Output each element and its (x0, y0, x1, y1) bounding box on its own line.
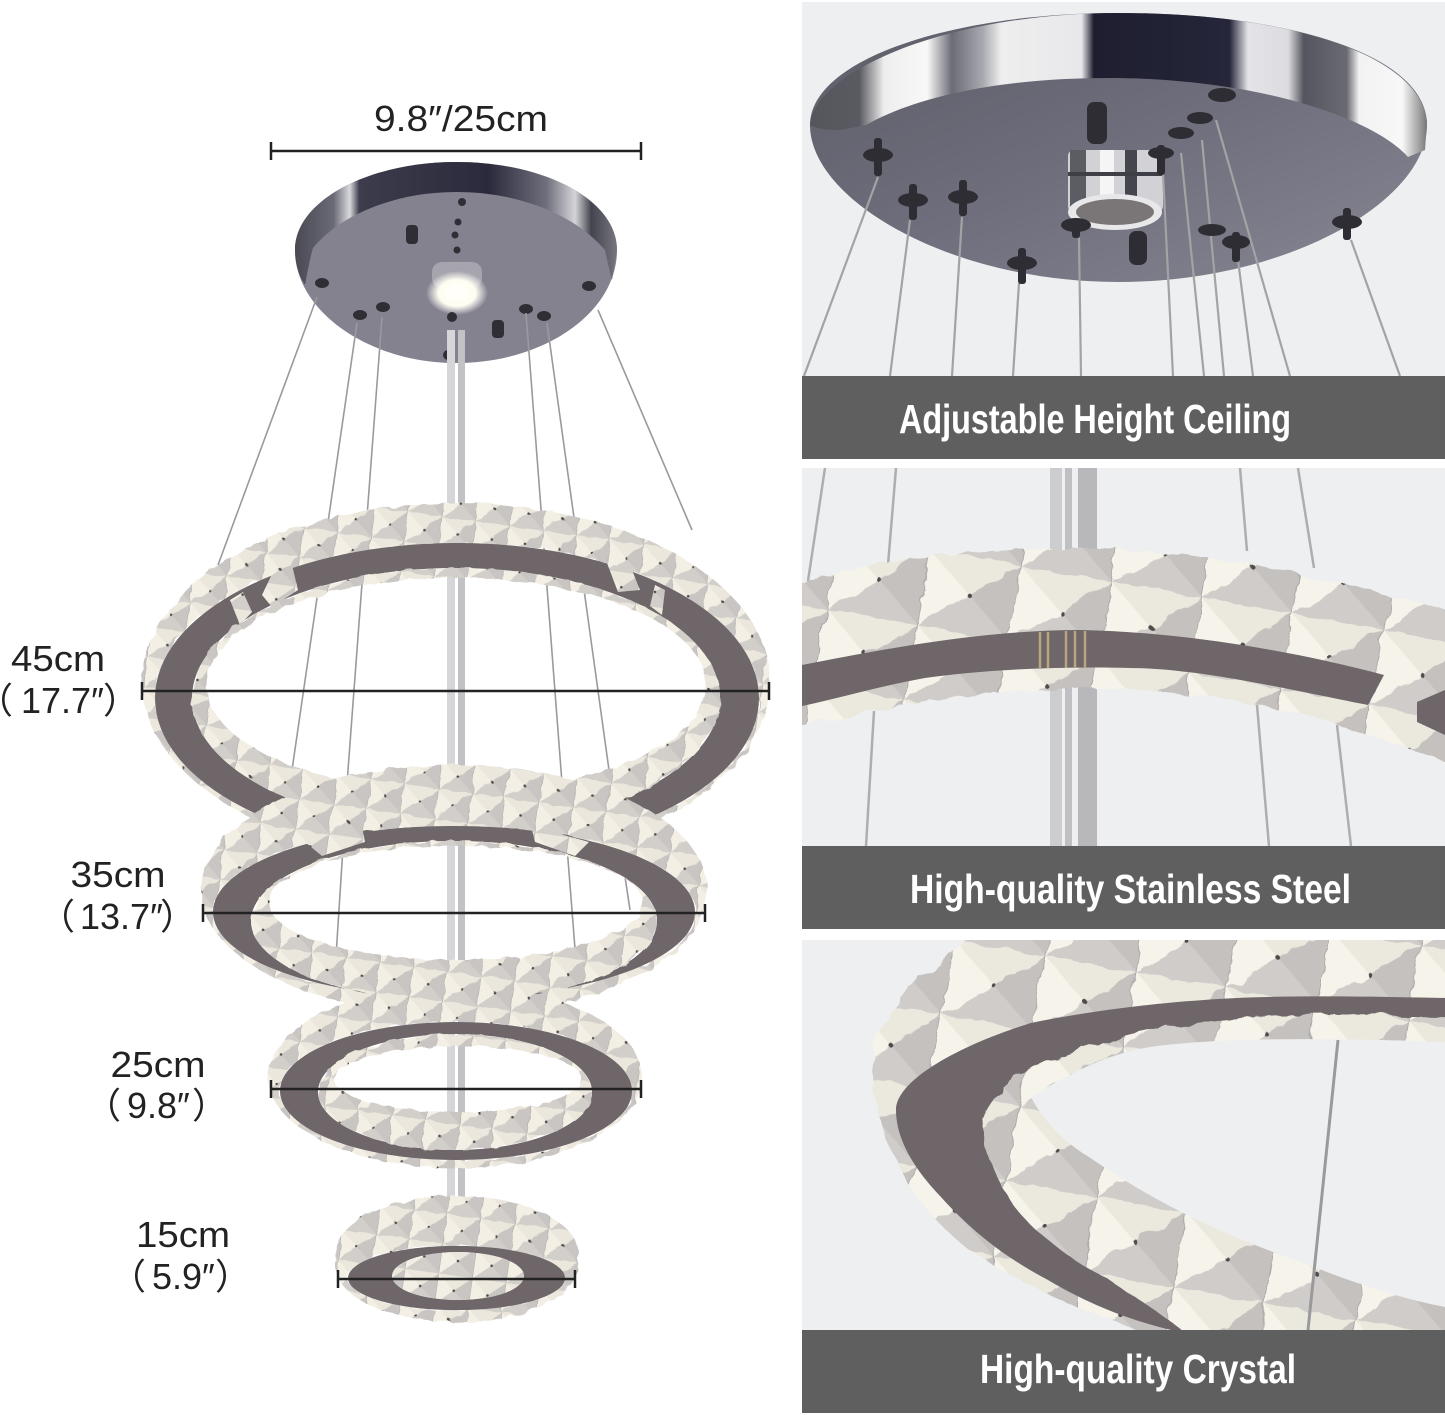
ring 35cm (201, 765, 707, 1015)
crystal band (790, 548, 1445, 766)
ring opening (1031, 1039, 1445, 1307)
ring 15cm (334, 1196, 578, 1322)
dimension: 15cm ring: 15cm (136, 1214, 230, 1255)
dimension: 35cm ring (39, 854, 705, 937)
panel: stainless steel (790, 468, 1445, 929)
dimension: 45cm ring: 17.7″ (21, 680, 104, 721)
dimension: 15cm ring: 5.9″ (152, 1256, 215, 1297)
inner crystal band (982, 1015, 1445, 1340)
caption bar: Adjustable Height Ceiling (899, 396, 1291, 442)
main chandelier (142, 162, 770, 1322)
dimension: 25cm ring: （ (85, 1085, 121, 1126)
dimension: 15cm ring (110, 1214, 575, 1297)
dimension: 35cm ring: 35cm (70, 854, 166, 895)
dimension: 35cm ring: （ (39, 896, 75, 937)
outer crystal ring (872, 930, 1445, 1340)
mounting knobs (863, 88, 1362, 284)
dimension: 35cm ring: ） (160, 896, 196, 937)
central fitting (1068, 150, 1163, 230)
dimension: 25cm ring: 9.8″ (127, 1085, 190, 1126)
dimension: 45cm ring (0, 638, 769, 721)
panel: crystal (802, 930, 1445, 1413)
dimension: 25cm ring (85, 1044, 641, 1126)
dimension: 45cm ring: 45cm (11, 638, 105, 679)
caption bar (802, 1330, 1445, 1413)
dimension: 35cm ring: 13.7″ (80, 896, 163, 937)
steel band right segment (1417, 690, 1445, 735)
ring 45cm (142, 503, 770, 861)
dimension: plate width (271, 98, 641, 160)
ceiling plate (295, 162, 617, 363)
hanging wire (1308, 1040, 1338, 1330)
center rod and suspension wires (218, 297, 692, 1210)
caption bar (802, 846, 1445, 929)
suspension wires (804, 120, 1400, 376)
dimension: 25cm ring: 25cm (110, 1044, 206, 1085)
caption bar (802, 376, 1445, 459)
dimension: 45cm ring: ） (103, 680, 139, 721)
dimension: plate width: 9.8″/25cm (374, 98, 548, 139)
dimension: 25cm ring: ） (192, 1085, 228, 1126)
gold joint lines (1040, 631, 1085, 668)
steel band (802, 630, 1384, 706)
dimension: 15cm ring: ） (215, 1256, 251, 1297)
ring 25cm (268, 986, 642, 1168)
caption bar: High-quality Stainless Steel (910, 866, 1351, 912)
panel: adjustable height ceiling (802, 2, 1445, 459)
dimension: 15cm ring: （ (110, 1256, 146, 1297)
steel crescent (896, 996, 1445, 1330)
caption bar: High-quality Crystal (980, 1346, 1296, 1392)
ceiling canopy (810, 13, 1427, 282)
wires and rods (808, 468, 1351, 846)
